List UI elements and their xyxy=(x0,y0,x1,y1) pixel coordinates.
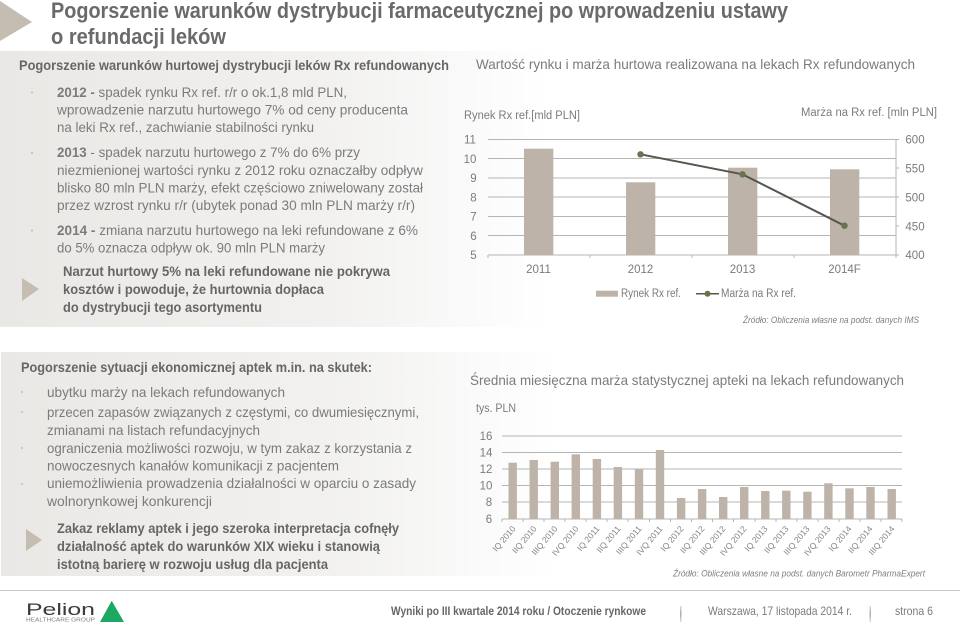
category labels xyxy=(526,264,861,276)
legend: Rynek Rx ref. xyxy=(621,288,681,300)
icon: header triangle xyxy=(0,1,32,41)
text block: 2013: niezmienionej wartości rynku z 2012 roku oznaczałby odpływ xyxy=(57,162,424,178)
category labels: 2013 xyxy=(730,264,755,276)
y axis labels: 14 xyxy=(480,448,493,460)
category labels: quarters: IQ 2012 xyxy=(658,524,686,553)
list: causes: zmianami na listach refundacyjnych xyxy=(47,422,260,438)
category labels: quarters: IIIQ 2010 xyxy=(529,524,560,557)
category labels: quarters: IQ 2014 xyxy=(826,524,854,553)
category labels: 2012 xyxy=(628,264,653,276)
text block: 2012: na leki Rx ref., zachwianie stabilności rynku xyxy=(57,119,314,135)
text block: 2013: 2013 - spadek narzutu hurtowego z 7% do 6% przy xyxy=(57,144,360,160)
logo: Pelion: Pelion xyxy=(26,600,95,619)
category labels: 2014F xyxy=(828,264,861,276)
text block: 2013: przez wzrost rynku r/r (ubytek ponad 30 mln PLN marży r/r) xyxy=(57,197,415,213)
y axis labels: 12 xyxy=(480,464,492,476)
category labels: quarters: IVQ 2013 xyxy=(802,524,833,558)
title xyxy=(51,0,789,49)
category labels: quarters xyxy=(490,524,897,558)
bars: market value xyxy=(524,149,859,255)
panel: background bottom xyxy=(1,352,561,576)
line: wholesale margin xyxy=(637,151,848,229)
y axis labels: 8 xyxy=(486,497,492,509)
heading: chart 1: Wartość rynku i marża hurtowa realizowana na lekach Rx refundowanych xyxy=(476,56,915,72)
callout: wholesale margin xyxy=(63,263,390,315)
callout: advertising ban: Zakaz reklamy aptek i jego szeroka interpretacja cofnęły xyxy=(57,520,399,536)
left axis labels: 10 xyxy=(464,154,476,166)
heading: wholesale distribution: Pogorszenie warunków hurtowej dystrybucji leków Rx refundowanych xyxy=(19,57,449,73)
panel: wholesale distribution text xyxy=(19,57,449,315)
category labels: quarters: IIQ 2013 xyxy=(762,524,791,555)
right axis labels: 600 xyxy=(905,134,925,146)
list: causes: ubytku marży na lekach refundowanych xyxy=(47,384,285,400)
callout: wholesale margin: kosztów i powoduje, że hurtownia dopłaca xyxy=(63,281,324,297)
chart: average monthly pharmacy margin xyxy=(470,371,925,580)
text block: 2014 xyxy=(31,222,418,256)
list: causes xyxy=(21,384,419,509)
left axis title: Rynek Rx ref.[mld PLN] xyxy=(464,110,580,122)
footer: page number: strona 6 xyxy=(895,604,933,618)
right axis labels xyxy=(905,134,925,262)
icon: callout triangle 2 xyxy=(26,529,42,551)
logo: Pelion xyxy=(26,600,124,624)
left axis labels: 11 xyxy=(464,134,476,146)
left axis labels: 6 xyxy=(470,231,477,243)
category labels: 2011 xyxy=(526,264,551,276)
list: causes: wolnorynkowej konkurencji xyxy=(46,493,212,509)
right axis title: Marża na Rx ref. [mln PLN] xyxy=(801,107,937,119)
category labels: quarters: IIIQ 2012 xyxy=(697,524,728,557)
callout: advertising ban xyxy=(57,520,399,572)
category labels: quarters: IIQ 2010 xyxy=(510,524,539,555)
y axis labels: 10 xyxy=(480,480,492,492)
bars: margin by quarter xyxy=(508,450,896,519)
heading: chart 2: Średnia miesięczna marża statystycznej apteki na lekach refundowanych xyxy=(470,371,904,388)
category labels: quarters: IIIQ 2013 xyxy=(781,524,812,557)
category labels: quarters: IIIQ 2011 xyxy=(614,524,644,557)
list: causes: uniemożliwienia prowadzenia działalności w oparciu o zasady xyxy=(47,475,416,491)
chart: market value and wholesale margin xyxy=(464,56,937,326)
y axis labels: 16 xyxy=(480,431,492,443)
callout: wholesale margin: do dystrybucji tego asortymentu xyxy=(63,299,262,315)
text block: 2014: do 5% oznacza odpływ ok. 90 mln PLN marży xyxy=(57,240,325,256)
category labels: quarters: IIQ 2012 xyxy=(678,524,707,555)
text block: 2014: 2014 - zmiana narzutu hurtowego na leki refundowane z 6% xyxy=(57,222,418,238)
footer: report title: Wyniki po III kwartale 2014 roku / Otoczenie rynkowe xyxy=(391,604,646,618)
title: o refundacji leków xyxy=(51,24,227,49)
panel: pharmacy situation text xyxy=(21,359,419,572)
right axis labels: 550 xyxy=(905,164,925,176)
left axis labels xyxy=(464,134,477,262)
text block: 2013 xyxy=(31,144,424,213)
callout: wholesale margin: Narzut hurtowy 5% na leki refundowane nie pokrywa xyxy=(63,263,390,279)
source note: Źródło: Obliczenia własne na podst. danych IMS xyxy=(742,315,920,326)
right axis labels: 450 xyxy=(905,222,925,234)
axis unit: tys. PLN xyxy=(476,403,516,415)
list: causes: ograniczenia możliwości rozwoju, w tym zakaz z korzystania z xyxy=(47,440,412,456)
right axis labels: 500 xyxy=(905,192,925,204)
text block: 2012: 2012 - spadek rynku Rx ref. r/r o ok.1,8 mld PLN, xyxy=(57,84,347,100)
legend xyxy=(596,288,796,300)
text block: 2012 xyxy=(31,84,408,135)
source note 2: Źródło: Obliczenia własne na podst. danych Barometr PharmaExpert xyxy=(672,568,925,580)
y axis labels xyxy=(480,431,493,526)
icon: callout triangle xyxy=(22,278,39,301)
category labels: quarters: IVQ 2012 xyxy=(718,524,749,558)
footer: date: Warszawa, 17 listopada 2014 r. xyxy=(708,604,852,618)
callout: advertising ban: istotną barierę w rozwoju usług dla pacjenta xyxy=(57,556,328,572)
heading: pharmacy situation: Pogorszenie sytuacji ekonomicznej aptek m.in. na skutek: xyxy=(21,359,372,375)
right axis labels: 400 xyxy=(905,250,925,262)
category labels: quarters: IIQ 2011 xyxy=(594,524,623,555)
text block: 2013: blisko 80 mln PLN marży, efekt częściowo zniwelowany został xyxy=(57,180,424,196)
logo: Pelion: HEALTHCARE GROUP xyxy=(26,618,96,624)
category labels: quarters: IQ 2013 xyxy=(742,524,770,553)
category labels: quarters: IQ 2011 xyxy=(575,524,602,553)
y axis labels: 6 xyxy=(486,514,492,526)
category labels: quarters: IIQ 2014 xyxy=(846,524,875,555)
list: causes: nowoczesnych kanałów komunikacji z pacjentem xyxy=(47,458,339,474)
left axis labels: 7 xyxy=(470,212,477,224)
callout: advertising ban: działalność aptek do warunków XIX wieku i stanowią xyxy=(57,538,380,554)
category labels: quarters: IQ 2010 xyxy=(490,524,518,553)
left axis labels: 5 xyxy=(470,250,477,262)
text block: 2012: wprowadzenie narzutu hurtowego 7% od ceny producenta xyxy=(56,102,408,118)
category labels: quarters: IIIQ 2014 xyxy=(866,524,897,557)
list: causes: przecen zapasów związanych z częstymi, co dwumiesięcznymi, xyxy=(47,404,419,420)
category labels: quarters: IVQ 2010 xyxy=(550,524,581,558)
category labels: quarters: IVQ 2011 xyxy=(634,524,665,557)
left axis labels: 9 xyxy=(470,173,477,185)
panel: background top xyxy=(0,51,550,327)
left axis labels: 8 xyxy=(470,192,477,204)
legend: Marża na Rx ref. xyxy=(721,288,796,300)
